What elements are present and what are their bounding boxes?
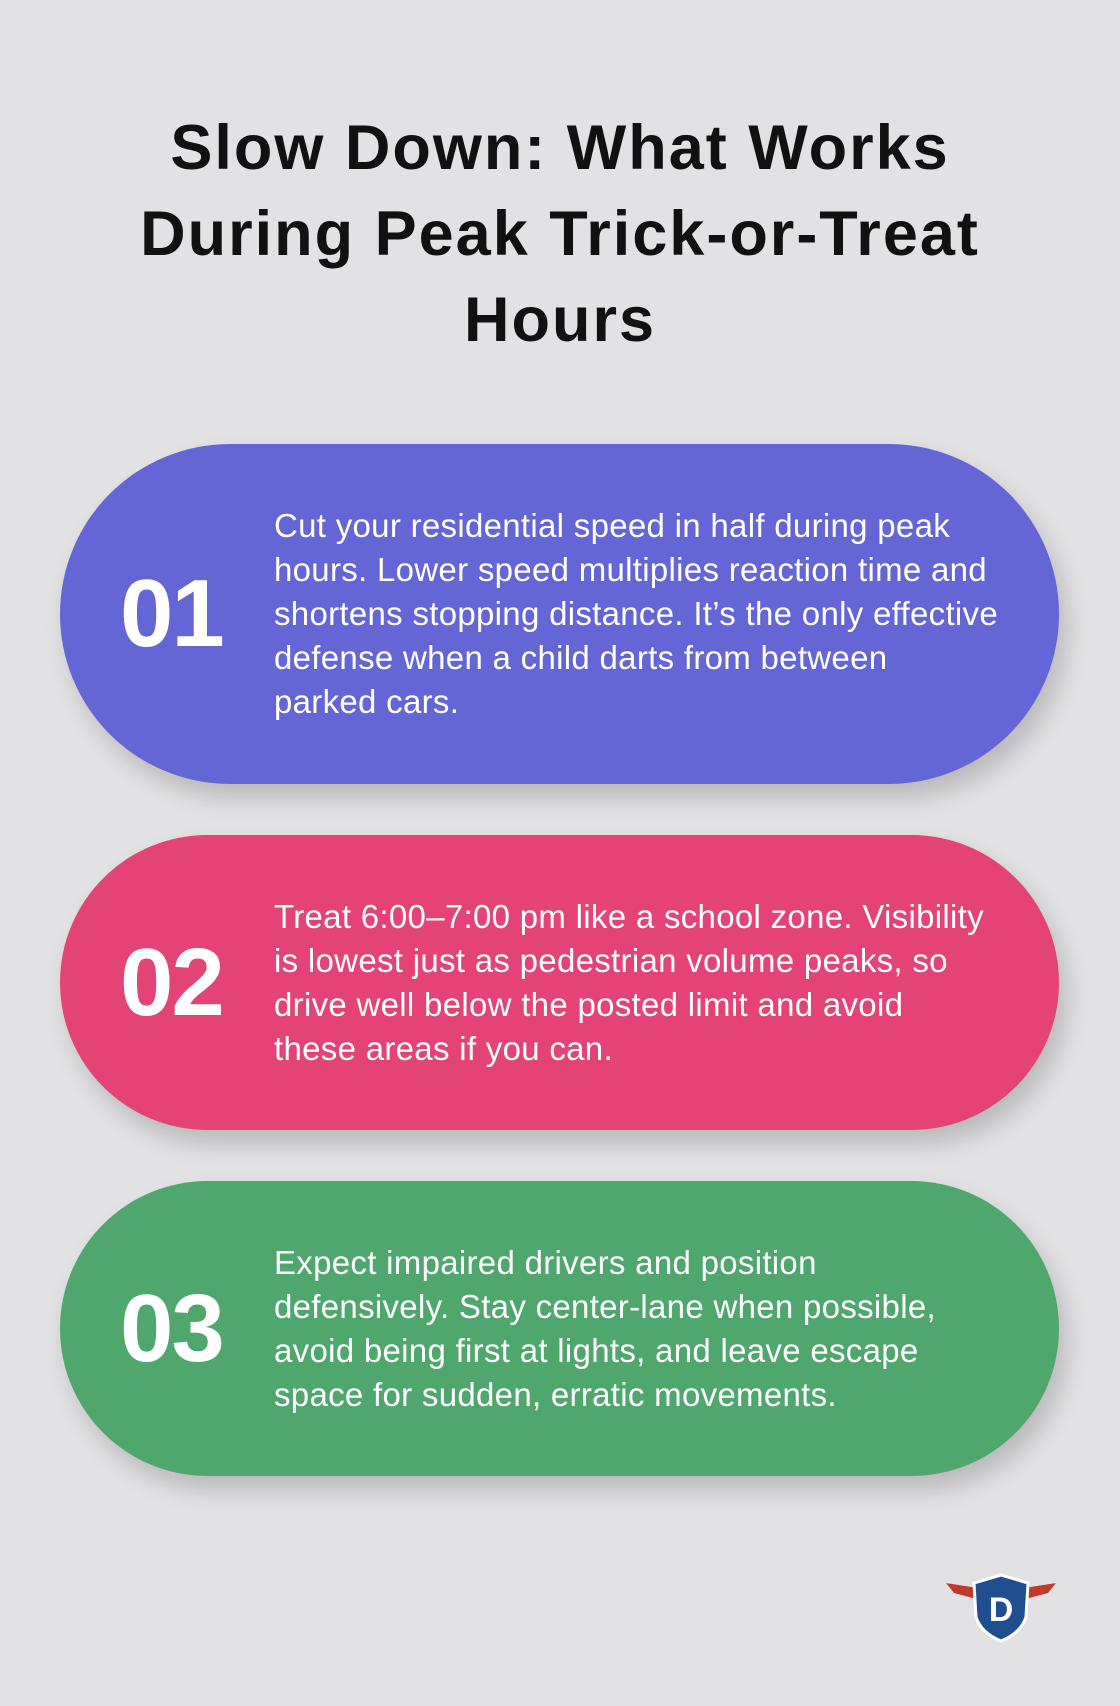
- text 02: Treat 6:00–7:00 pm like a school zone. Visibility: [274, 898, 984, 934]
- panel: step 03: [60, 1181, 1059, 1476]
- number 01: 01: [120, 560, 223, 667]
- title: During Peak Trick-or-Treat: [140, 199, 980, 269]
- text 03: Expect impaired drivers and position: [274, 1244, 817, 1280]
- text 03: defensively. Stay center-lane when possible,: [274, 1288, 936, 1324]
- number 02: 02: [120, 928, 223, 1036]
- text 02: drive well below the posted limit and avoid: [274, 986, 903, 1022]
- text 03: [274, 1244, 936, 1413]
- panel: step 01: [60, 444, 1059, 784]
- text 01: Cut your residential speed in half during peak: [274, 507, 950, 544]
- icon: logo shield: D: [989, 1591, 1013, 1629]
- text 01: defense when a child darts from between: [274, 639, 887, 676]
- text 03: space for sudden, erratic movements.: [274, 1376, 837, 1412]
- icon: logo shield: [946, 1574, 1056, 1642]
- text 01: hours. Lower speed multiplies reaction time and: [274, 551, 987, 588]
- text 01: parked cars.: [274, 683, 459, 720]
- title: [140, 113, 980, 355]
- text 01: shortens stopping distance. It’s the only effective: [274, 595, 998, 632]
- number 03: 03: [120, 1274, 223, 1382]
- text 02: is lowest just as pedestrian volume peaks, so: [274, 942, 948, 978]
- title: Slow Down: What Works: [170, 113, 950, 183]
- text 02: these areas if you can.: [274, 1030, 613, 1066]
- text 01: [274, 507, 998, 720]
- title: Hours: [464, 285, 656, 355]
- panel: step 02: [60, 835, 1059, 1130]
- text 02: [274, 898, 984, 1067]
- text 03: avoid being first at lights, and leave escape: [274, 1332, 919, 1368]
